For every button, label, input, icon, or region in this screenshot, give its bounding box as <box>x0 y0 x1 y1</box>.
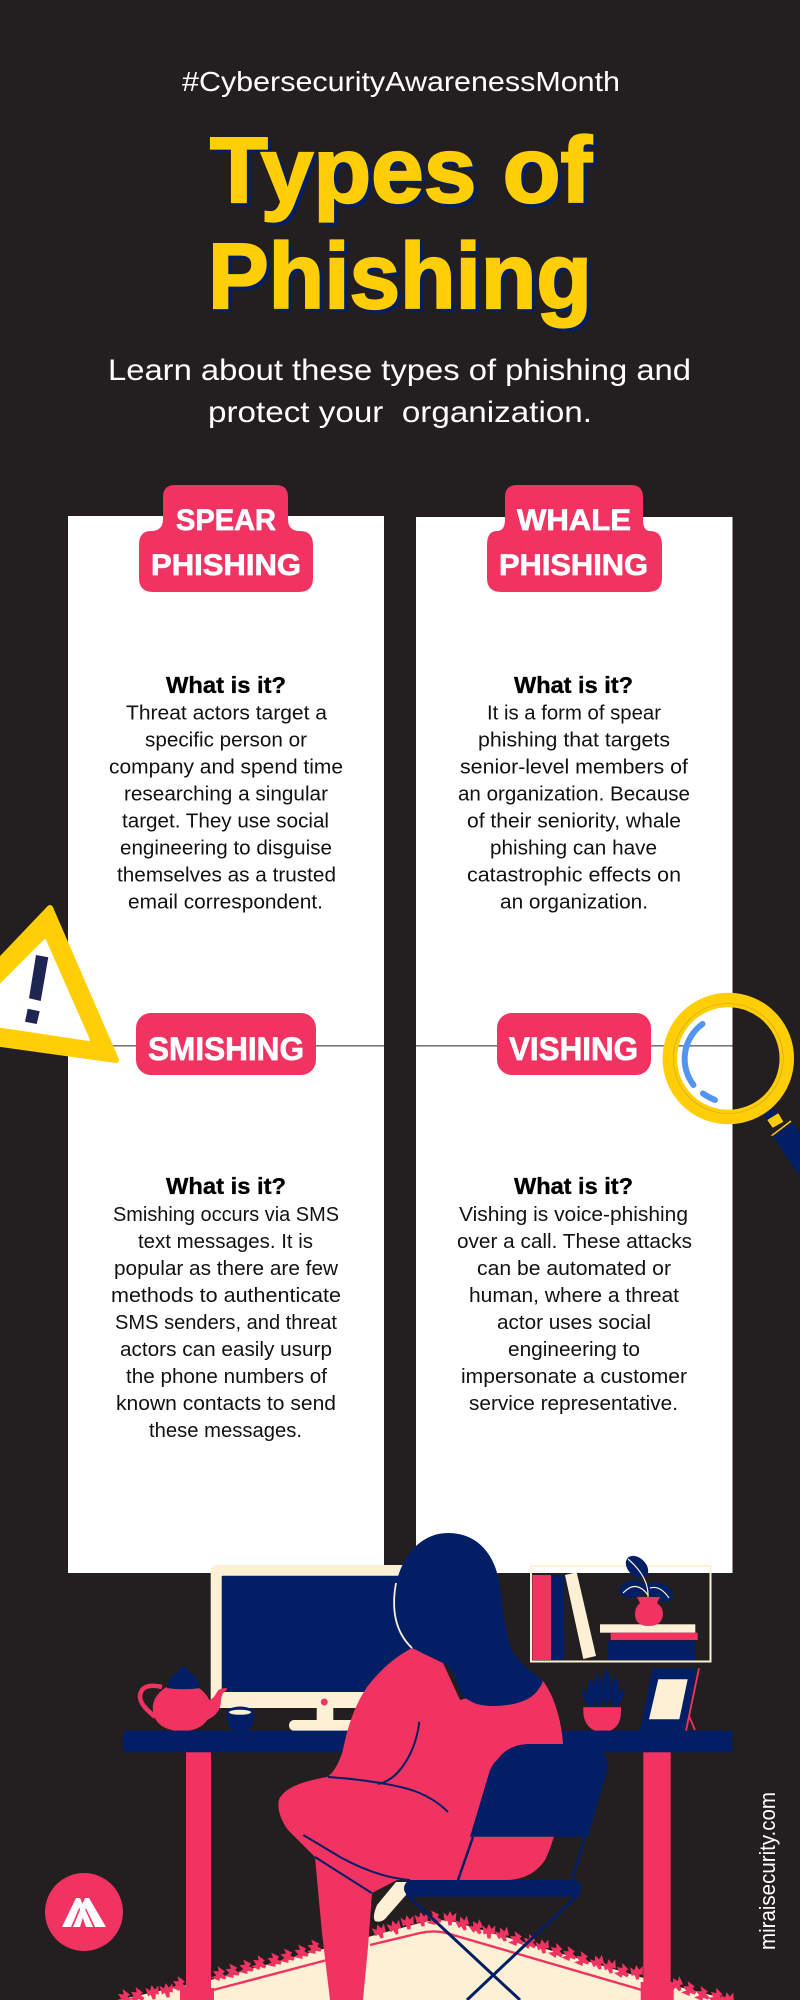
badge: whale phishing: PHISHING <box>499 549 648 582</box>
illustration: desk plant <box>580 1670 626 1731</box>
badge: spear phishing: PHISHING <box>151 549 301 582</box>
text block: whale phishing: What is it? <box>514 672 633 698</box>
badge: whale phishing <box>487 485 662 592</box>
divider line right <box>416 1045 732 1047</box>
divider line left <box>68 1045 384 1047</box>
hair <box>394 1533 542 1706</box>
text block: vishing: engineering to <box>508 1339 640 1361</box>
icon: potted plant on shelf <box>618 1551 676 1626</box>
text block: whale phishing: an organization. Because <box>458 784 690 806</box>
text block: smishing: What is it? <box>166 1173 286 1199</box>
illustration: monitor <box>211 1565 421 1731</box>
title <box>208 118 597 331</box>
text block: spear phishing: What is it? <box>166 672 286 698</box>
badge: smishing: SMISHING <box>148 1031 304 1067</box>
text block: vishing: impersonate a customer <box>461 1366 687 1388</box>
badge: spear phishing <box>139 485 313 592</box>
text block: whale phishing: phishing can have <box>490 838 657 860</box>
text block: smishing: Smishing occurs via SMS <box>113 1204 339 1226</box>
text block: spear phishing: engineering to disguise <box>120 838 332 860</box>
title: Types of <box>210 118 593 222</box>
icon: warning triangle <box>0 908 116 1060</box>
badge: vishing: VISHING <box>509 1031 638 1067</box>
illustration: desk <box>123 1731 732 2000</box>
text block: vishing: service representative. <box>469 1393 678 1415</box>
text block: whale phishing: It is a form of spear <box>487 702 661 724</box>
arm and leg lines <box>303 1722 448 1893</box>
illustration: chair <box>404 1744 608 1897</box>
text block: vishing: human, where a threat <box>469 1285 679 1307</box>
illustration: photo frame <box>640 1668 699 1731</box>
text block: spear phishing: company and spend time <box>109 756 343 778</box>
hair outline <box>394 1583 412 1648</box>
text block: vishing: over a call. These attacks <box>457 1231 692 1253</box>
text block: vishing <box>457 1173 692 1415</box>
text block: whale phishing: catastrophic effects on <box>467 864 681 886</box>
text block: vishing: What is it? <box>514 1173 633 1199</box>
text block: whale phishing <box>458 672 690 914</box>
panel: right column <box>416 517 732 1573</box>
logo <box>45 1873 123 1951</box>
text block: smishing: these messages. <box>149 1420 302 1442</box>
text block: whale phishing: phishing that targets <box>478 730 670 752</box>
badge: smishing <box>136 1013 316 1075</box>
text block: spear phishing: themselves as a trusted <box>117 864 336 886</box>
text block: spear phishing: specific person or <box>145 730 307 752</box>
text block: smishing: text messages. It is <box>138 1231 313 1253</box>
text block: whale phishing: an organization. <box>500 892 648 914</box>
hashtag: #CybersecurityAwarenessMonth <box>182 66 620 97</box>
text block: vishing: actor uses social <box>497 1312 651 1334</box>
website url: miraisecurity.com <box>755 1792 780 1950</box>
text block: smishing: popular as there are few <box>114 1258 339 1280</box>
text block: spear phishing: target. They use social <box>122 810 329 832</box>
illustration: bookshelf <box>531 1551 710 1662</box>
text block: spear phishing <box>109 672 343 914</box>
subtitle <box>108 354 691 429</box>
badge: whale phishing: WHALE <box>517 504 631 537</box>
subtitle: protect your organization. <box>208 396 592 429</box>
text block: smishing <box>111 1173 341 1442</box>
title: Phishing <box>212 227 596 331</box>
text block: smishing: known contacts to send <box>116 1393 336 1415</box>
title: Phishing <box>208 224 592 328</box>
text block: vishing: Vishing is voice-phishing <box>459 1204 688 1226</box>
text block: smishing: the phone numbers of <box>126 1366 327 1388</box>
text block: spear phishing: researching a singular <box>124 784 328 806</box>
text block: spear phishing: Threat actors target a <box>126 702 328 724</box>
text block: spear phishing: email correspondent. <box>128 892 323 914</box>
title: Types of <box>214 121 597 225</box>
text block: smishing: methods to authenticate <box>111 1285 341 1307</box>
badge: vishing <box>497 1013 651 1075</box>
panel: left column <box>68 516 384 1573</box>
badge: spear phishing: SPEAR <box>176 504 276 537</box>
text block: smishing: actors can easily usurp <box>120 1339 332 1361</box>
text block: smishing: SMS senders, and threat <box>115 1312 337 1334</box>
illustration: tea cup <box>227 1706 254 1731</box>
text block: vishing: can be automated or <box>477 1258 671 1280</box>
shoe <box>374 1882 407 1922</box>
text block: whale phishing: of their seniority, whale <box>467 810 681 832</box>
illustration: teapot <box>140 1666 227 1731</box>
illustration: chair legs <box>405 1893 580 2000</box>
text block: whale phishing: senior-level members of <box>460 756 688 778</box>
subtitle: Learn about these types of phishing and <box>108 354 691 387</box>
illustration: rug <box>115 1910 736 2000</box>
icon: magnifying glass <box>670 1000 800 1177</box>
illustration: person <box>278 1533 563 2000</box>
